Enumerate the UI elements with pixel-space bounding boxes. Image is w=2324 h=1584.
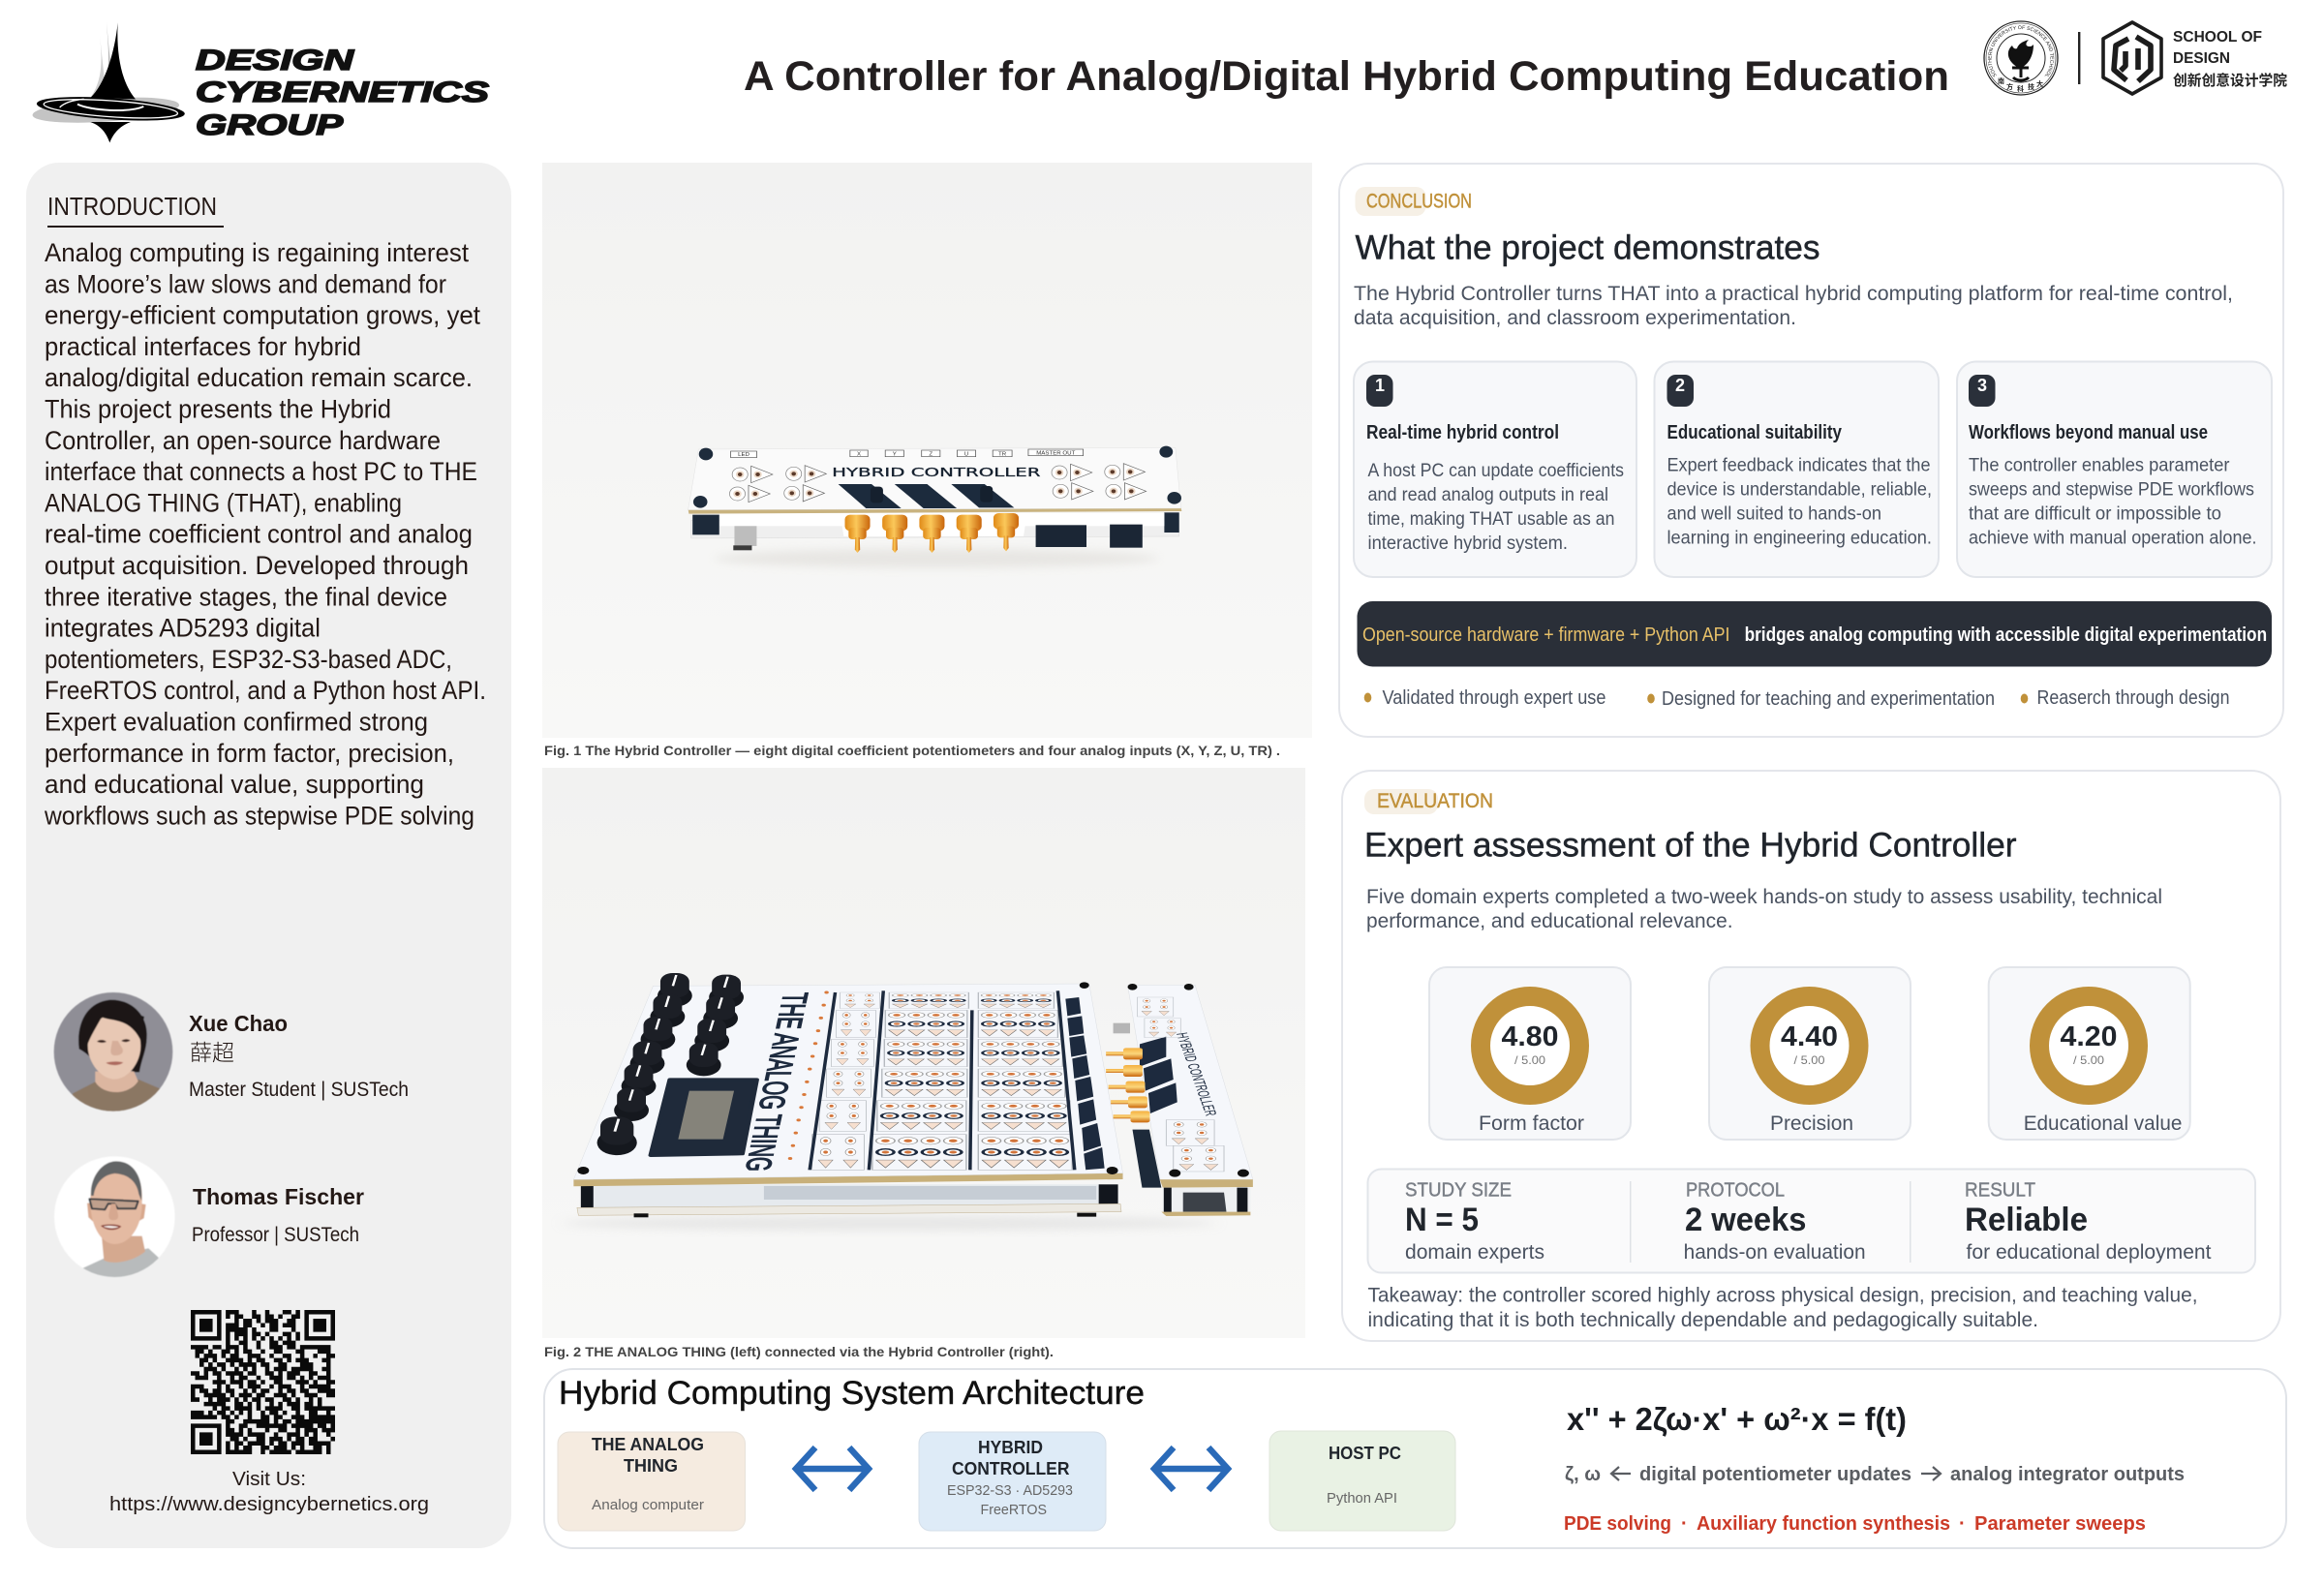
panel: conclusion	[1339, 164, 2283, 737]
icon: spinning top emblem	[32, 22, 186, 142]
text block: abstract: as Moore’s law slows and demand for	[45, 269, 446, 298]
card body: that are difficult or impossible to	[1969, 503, 2221, 525]
text: Thomas Fischer: Professor | SUSTech	[192, 1224, 359, 1246]
QR code	[191, 1312, 335, 1452]
text block: evaluation intro: performance, and educational relevance.	[1366, 910, 1733, 932]
text block: abstract: workflows such as stepwise PDE solving	[44, 801, 474, 830]
card body: Expert feedback indicates that the	[1667, 455, 1931, 476]
stat: study size: STUDY SIZE	[1405, 1179, 1512, 1201]
portrait: Thomas Fischer	[54, 1156, 174, 1278]
bullets: Validated through expert use	[1383, 687, 1605, 709]
donut chart 4.20	[2039, 996, 2138, 1095]
donut chart 4.40	[1760, 996, 1859, 1095]
card body: achieve with manual operation alone.	[1969, 527, 2256, 548]
text: Xue Chao: Master Student | SUSTech	[189, 1079, 409, 1101]
arrow: bidirectional digital link	[1154, 1447, 1228, 1490]
bullets: Designed for teaching and experimentation	[1662, 688, 1995, 710]
icon: university seal: 大	[2036, 79, 2043, 88]
text: Xue Chao: 薛超	[190, 1040, 234, 1065]
figure 1: photo of the Hybrid Controller: MASTER OUT	[1036, 451, 1076, 456]
wordmark: CYBERNETICS	[196, 76, 489, 108]
text: applications: PDE solving	[1564, 1513, 1671, 1535]
badge: conclusion: CONCLUSION	[1366, 190, 1472, 213]
text block: abstract: Expert evaluation confirmed strong	[45, 707, 428, 736]
text: applications: Parameter sweeps	[1974, 1513, 2146, 1535]
badge: evaluation: EVALUATION	[1377, 790, 1493, 812]
stat: study size: domain experts	[1405, 1241, 1544, 1264]
text block: abstract: Analog computing is regaining interest	[45, 238, 469, 267]
heading: conclusion: What the project demonstrates	[1356, 228, 1820, 267]
block: The Analog Thing	[558, 1432, 746, 1531]
number badge 3: 3	[1977, 376, 1987, 395]
wordmark	[196, 45, 489, 141]
text block: takeaway	[1367, 1284, 2198, 1331]
card: real-time hybrid control	[1354, 362, 1636, 577]
stat: study size	[1405, 1179, 1544, 1264]
number badge 1: 1	[1375, 376, 1385, 395]
text block: abstract: real-time coefficient control and analog	[45, 520, 473, 549]
score card: educational value: Educational value	[2024, 1112, 2182, 1135]
caption: figure 1: Fig. 1 The Hybrid Controller — eight digital coefficient potentiometers and four analog inputs (X, Y, Z, U, TR) .	[544, 743, 1280, 758]
card body	[1667, 455, 1932, 548]
stats strip	[1367, 1170, 2255, 1272]
block: Host PC: HOST PC	[1329, 1444, 1401, 1463]
score card: precision	[1709, 967, 1911, 1140]
icon: university seal: 方	[2006, 82, 2013, 91]
stat: protocol: 2 weeks	[1685, 1202, 1807, 1238]
donut chart 4.80: 4.80	[1501, 1021, 1559, 1052]
card body	[1969, 455, 2256, 548]
text block: abstract: integrates AD5293 digital	[45, 614, 321, 643]
number badge 2	[1667, 375, 1694, 407]
caption: figure 2: Fig. 2 THE ANALOG THING (left) connected via the Hybrid Controller (right).	[544, 1344, 1054, 1359]
wordmark: GROUP	[196, 109, 344, 141]
text block: conclusion intro	[1354, 283, 2233, 329]
card: workflows beyond manual use	[1957, 362, 2272, 577]
figure 1: photo of the Hybrid Controller: Y	[893, 452, 897, 457]
block: Hybrid Controller: ESP32-S3 · AD5293	[947, 1483, 1073, 1499]
text block: abstract: FreeRTOS control, and a Python host API.	[45, 676, 486, 705]
donut chart 4.40: / 5.00	[1793, 1053, 1825, 1067]
logo: Design Cybernetics Group	[32, 22, 489, 142]
number badge 2: 2	[1675, 376, 1685, 395]
heading: introduction: INTRODUCTION	[47, 192, 217, 221]
block: Hybrid Controller: CONTROLLER	[952, 1459, 1069, 1478]
figure 1: photo of the Hybrid Controller: LED	[738, 452, 749, 458]
card body: interactive hybrid system.	[1367, 533, 1568, 554]
text block: abstract: three iterative stages, the final device	[45, 582, 447, 611]
block: The Analog Thing: THING	[624, 1456, 678, 1476]
block: Hybrid Controller: FreeRTOS	[980, 1503, 1047, 1518]
card title: Real-time hybrid control	[1366, 422, 1559, 443]
number badge 3	[1969, 375, 1995, 407]
card body: The controller enables parameter	[1969, 455, 2230, 476]
figure 1: photo of the Hybrid Controller	[542, 163, 1312, 738]
text block: conclusion intro: The Hybrid Controller turns THAT into a practical hybrid computing platform for real-time control,	[1354, 283, 2233, 305]
text block: abstract: interface that connects a host PC to THE	[45, 457, 477, 486]
text block: abstract: Controller, an open-source hardware	[45, 426, 441, 455]
donut chart 4.80: / 5.00	[1514, 1053, 1545, 1067]
card: educational suitability	[1654, 362, 1939, 577]
text block: conclusion intro: data acquisition, and classroom experimentation.	[1354, 307, 1796, 329]
stat: study size: N = 5	[1405, 1202, 1479, 1238]
text block: abstract: ANALOG THING (THAT), enabling	[45, 488, 402, 517]
title: A Controller for Analog/Digital Hybrid Computing Education	[744, 53, 1949, 100]
stat: result: for educational deployment	[1966, 1241, 2212, 1264]
text: website	[109, 1469, 429, 1515]
figure 2: photo of The Analog Thing with controller	[542, 768, 1305, 1338]
wordmark: DESIGN	[196, 45, 355, 76]
card title: Educational suitability	[1667, 422, 1843, 443]
figure 1: photo of the Hybrid Controller: X	[857, 452, 861, 457]
card body: and read analog outputs in real	[1367, 484, 1608, 505]
donut chart 4.80	[1481, 996, 1579, 1095]
callout: key message	[1358, 601, 2272, 666]
panel: system architecture	[544, 1369, 2286, 1548]
card title: Workflows beyond manual use	[1969, 422, 2208, 443]
donut chart 4.20: 4.20	[2061, 1021, 2117, 1052]
text: applications: ·	[1681, 1513, 1688, 1535]
figure 2: photo of The Analog Thing with controller: HYBRID CONTROLLER	[1173, 1031, 1220, 1117]
score card: form factor: Form factor	[1479, 1112, 1584, 1135]
figure 1: photo of the Hybrid Controller: TR	[998, 452, 1006, 457]
text: Xue Chao	[189, 1011, 409, 1101]
heading: architecture: Hybrid Computing System Architecture	[559, 1375, 1145, 1412]
block: The Analog Thing: THE ANALOG	[592, 1435, 704, 1454]
icon: university seal: 南	[1998, 76, 2004, 85]
school wordmark	[2173, 29, 2287, 89]
stat: protocol: PROTOCOL	[1686, 1179, 1785, 1201]
card body: and well suited to hands-on	[1667, 503, 1881, 525]
text: signal mapping: digital potentiometer updates	[1639, 1464, 1911, 1485]
text block: abstract	[44, 238, 486, 830]
stat: protocol: hands-on evaluation	[1684, 1241, 1866, 1264]
figure 1: photo of the Hybrid Controller: Z	[929, 452, 933, 457]
score card: form factor	[1429, 967, 1631, 1140]
block: Host PC	[1269, 1431, 1455, 1531]
text block: abstract: performance in form factor, precision,	[45, 739, 454, 768]
block: Hybrid Controller: HYBRID	[978, 1438, 1043, 1457]
text block: abstract: and educational value, supporting	[45, 770, 424, 799]
text: signal mapping	[1565, 1464, 2185, 1485]
bullets: Reaserch through design	[2037, 687, 2229, 709]
icon: university seal: 科	[2017, 84, 2024, 93]
text block: abstract: potentiometers, ESP32-S3-based ADC,	[45, 645, 452, 674]
panel: introduction and team	[26, 163, 511, 1548]
panel: evaluation	[1342, 771, 2280, 1341]
portrait: Xue Chao	[53, 991, 173, 1112]
text block: takeaway: Takeaway: the controller scored highly across physical design, precision, and teaching value,	[1367, 1284, 2198, 1307]
school wordmark: SCHOOL OF	[2173, 29, 2262, 46]
donut chart 4.40: 4.40	[1781, 1021, 1838, 1052]
block: Host PC: Python API	[1327, 1491, 1397, 1507]
icon: hexagon SD mark	[2103, 22, 2161, 94]
logos: SUSTech and School of Design	[1983, 20, 2287, 96]
text: Xue Chao: Xue Chao	[189, 1011, 288, 1036]
stat: result: RESULT	[1965, 1179, 2035, 1201]
badge: conclusion	[1356, 187, 1472, 216]
formula: x'' + 2ζω·x' + ω²·x = f(t)	[1567, 1401, 1907, 1437]
text block: abstract: output acquisition. Developed through	[45, 551, 469, 580]
icon: university seal: 技	[2028, 82, 2034, 91]
card body: sweeps and stepwise PDE workflows	[1969, 478, 2254, 500]
figure 2: photo of The Analog Thing with controller: THE ANALOG THING	[738, 992, 814, 1172]
text: applications	[1564, 1513, 2146, 1535]
bullets	[1364, 687, 2229, 710]
stat: result	[1965, 1179, 2212, 1264]
heading: evaluation: Expert assessment of the Hybrid Controller	[1364, 827, 2017, 864]
text: applications: ·	[1959, 1513, 1966, 1535]
text block: abstract: This project presents the Hybrid	[45, 395, 391, 424]
arrow: bidirectional analog link	[796, 1447, 869, 1490]
text: applications: Auxiliary function synthesis	[1697, 1513, 1950, 1535]
text block: evaluation intro: Five domain experts completed a two-week hands-on study to assess usability, technical	[1366, 886, 2162, 908]
card body: A host PC can update coefficients	[1367, 460, 1624, 481]
stat: result: Reliable	[1965, 1202, 2088, 1238]
card body	[1367, 460, 1624, 554]
stat: protocol	[1684, 1179, 1866, 1264]
icon: university seal	[1983, 20, 2059, 96]
figure 1: photo of the Hybrid Controller: HYBRID CONTROLLER	[832, 467, 1041, 480]
number badge 1	[1366, 375, 1392, 407]
text: Thomas Fischer	[192, 1184, 364, 1246]
text block: abstract: practical interfaces for hybrid	[45, 332, 361, 361]
block: The Analog Thing: Analog computer	[592, 1498, 704, 1513]
school wordmark: 创新创意设计学院	[2173, 72, 2287, 89]
block: Hybrid Controller	[919, 1432, 1106, 1531]
text block: evaluation intro	[1366, 886, 2162, 932]
text: Thomas Fischer: Thomas Fischer	[193, 1184, 364, 1209]
text block: takeaway: indicating that it is both technically dependable and pedagogically suitable.	[1367, 1309, 2038, 1331]
text block: abstract: energy-efficient computation grows, yet	[45, 301, 480, 330]
text: website: https://www.designcybernetics.org	[109, 1494, 429, 1515]
card body: device is understandable, reliable,	[1667, 478, 1932, 500]
school wordmark: DESIGN	[2173, 50, 2230, 67]
text: signal mapping: analog integrator outputs	[1950, 1464, 2185, 1485]
score card: precision: Precision	[1770, 1112, 1853, 1135]
text: website: Visit Us:	[232, 1469, 306, 1490]
text block: abstract: analog/digital education remain scarce.	[45, 363, 473, 392]
callout: key message: Open-source hardware + firmware + Python API	[1362, 624, 1729, 646]
donut chart 4.20: / 5.00	[2073, 1053, 2104, 1067]
score card: educational value	[1989, 967, 2190, 1140]
text: signal mapping: ζ, ω	[1565, 1464, 1601, 1485]
card body: learning in engineering education.	[1667, 527, 1932, 548]
card body: time, making THAT usable as an	[1367, 508, 1615, 530]
figure 1: photo of the Hybrid Controller: U	[964, 452, 968, 457]
